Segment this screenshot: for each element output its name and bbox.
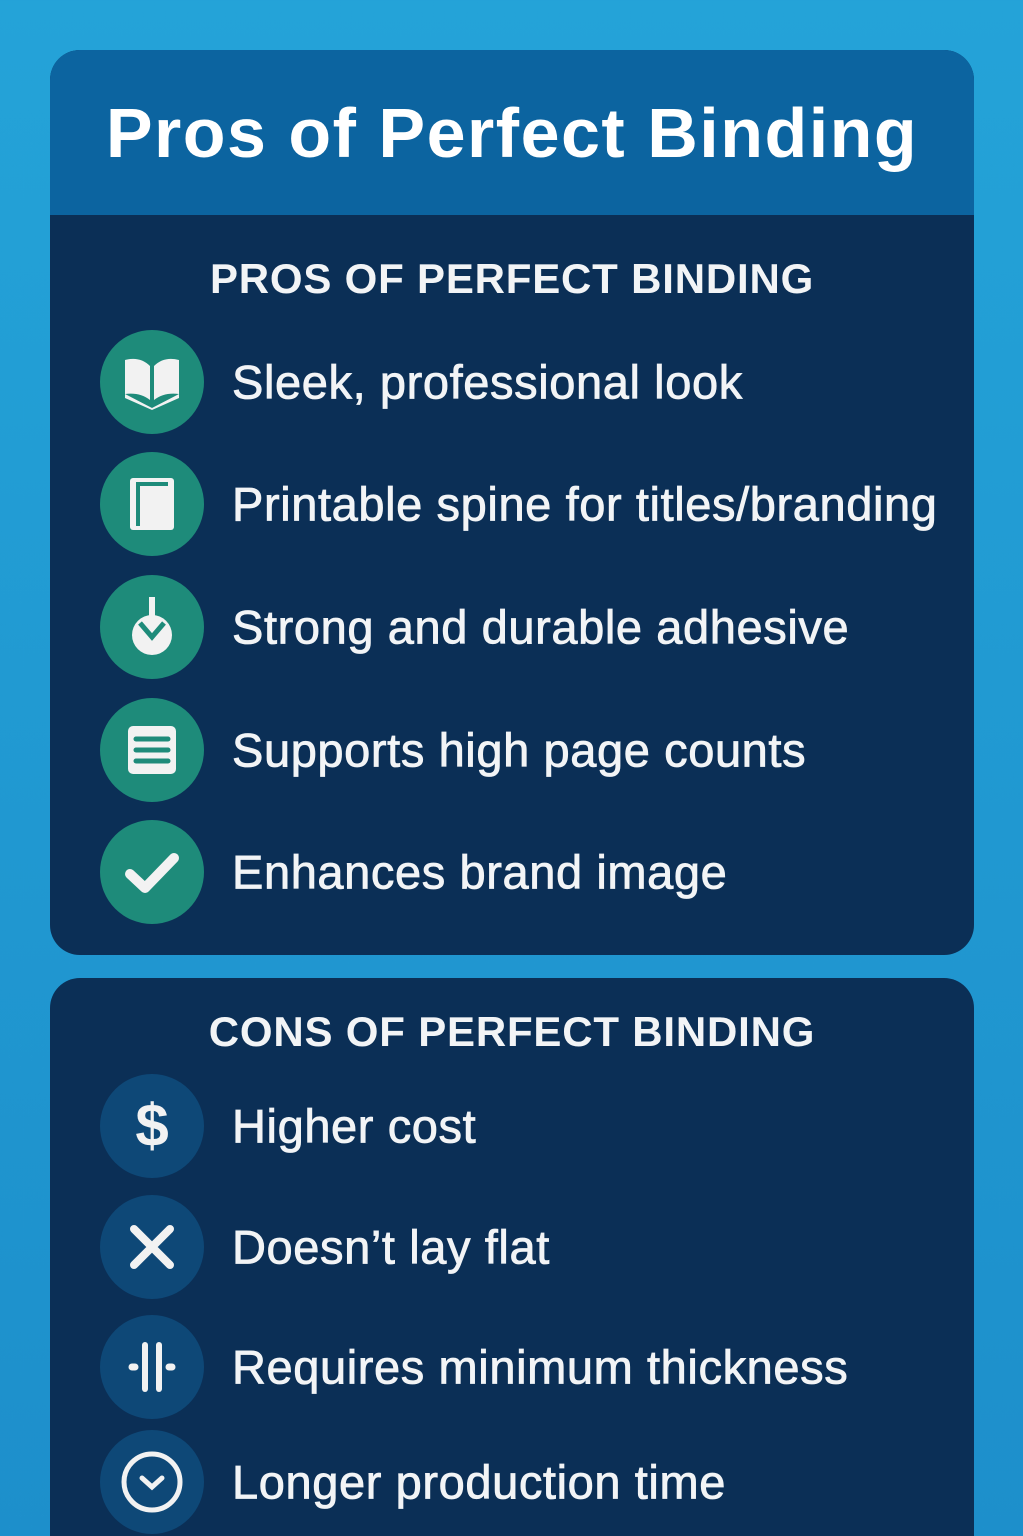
item: sleek look: Sleek, professional look xyxy=(232,356,743,408)
item: printable spine: Printable spine for titles/branding xyxy=(232,478,938,530)
item: adhesive xyxy=(100,575,849,679)
item: production time xyxy=(100,1430,726,1534)
item: sleek look xyxy=(100,330,744,434)
item: brand image xyxy=(100,820,727,924)
item: higher cost xyxy=(100,1074,476,1178)
item: page counts: Supports high page counts xyxy=(232,724,806,776)
item: adhesive: Strong and durable adhesive xyxy=(232,600,849,654)
item: printable spine xyxy=(100,452,938,556)
heading: pros: PROS OF PERFECT BINDING xyxy=(210,255,814,302)
item: lay flat: Doesn’t lay flat xyxy=(232,1220,550,1274)
item: page counts xyxy=(100,698,806,802)
heading: cons: CONS OF PERFECT BINDING xyxy=(209,1008,815,1055)
item: lay flat xyxy=(100,1195,550,1299)
panel: cons xyxy=(50,978,974,1536)
item: brand image: Enhances brand image xyxy=(232,846,727,898)
item: higher cost: Higher cost xyxy=(232,1100,476,1152)
title: Pros of Perfect Binding xyxy=(106,94,918,172)
item: production time: Longer production time xyxy=(232,1456,726,1508)
item: thickness: Requires minimum thickness xyxy=(232,1340,848,1394)
panel: pros xyxy=(50,50,974,955)
item: thickness xyxy=(100,1315,848,1419)
item: higher cost: $ xyxy=(135,1092,169,1159)
title xyxy=(50,50,974,215)
